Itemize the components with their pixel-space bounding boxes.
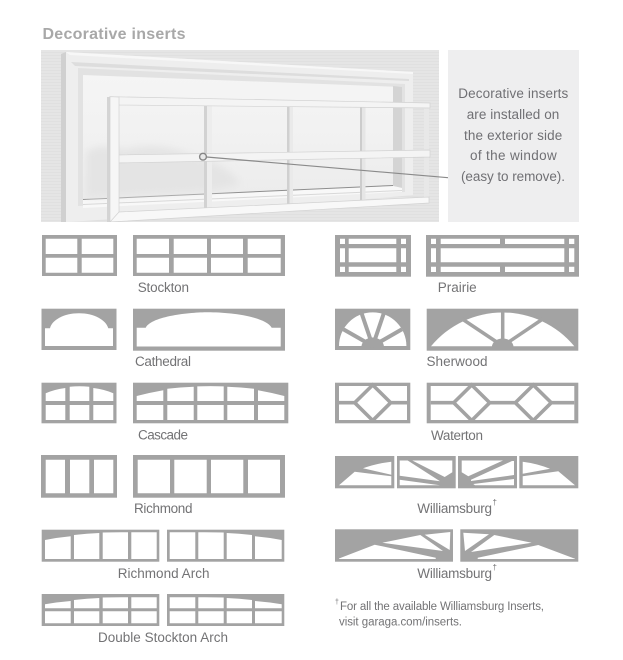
insert: Richmond xyxy=(41,455,285,516)
callout panel: of the window xyxy=(470,148,557,163)
insert: Williamsburg two-panel: Williamsburg xyxy=(417,566,492,581)
insert: Stockton xyxy=(42,235,285,295)
trees reflection xyxy=(86,146,240,198)
insert: Stockton: Stockton xyxy=(138,280,189,295)
window trim xyxy=(61,52,413,222)
insert: Williamsburg four-panel: † xyxy=(492,498,497,507)
callout leader line xyxy=(200,153,448,178)
insert: Double Stockton Arch: Double Stockton Arch xyxy=(98,630,228,645)
insert: Sherwood xyxy=(335,309,578,369)
insert: Prairie: Prairie xyxy=(438,280,477,295)
callout panel: Decorative inserts xyxy=(458,86,569,101)
callout panel: (easy to remove). xyxy=(461,169,565,184)
callout panel xyxy=(448,50,579,222)
title: Decorative inserts xyxy=(42,26,186,43)
insert: Richmond: Richmond xyxy=(134,501,192,516)
insert: Double Stockton Arch xyxy=(42,594,284,645)
footnote: † xyxy=(335,599,339,606)
insert: Cascade xyxy=(42,383,288,442)
callout panel: the exterior side xyxy=(464,128,562,143)
footnote: visit garaga.com/inserts. xyxy=(339,617,462,629)
insert: Waterton: Waterton xyxy=(431,428,483,443)
insert: Cathedral: Cathedral xyxy=(135,354,191,369)
insert: Richmond Arch: Richmond Arch xyxy=(118,566,210,581)
footnote: For all the available Williamsburg Inserts, xyxy=(340,601,544,613)
insert: Sherwood: Sherwood xyxy=(426,354,488,369)
insert: Richmond Arch xyxy=(42,530,284,581)
insert: Cathedral xyxy=(42,309,285,369)
callout panel: are installed on xyxy=(467,107,559,122)
insert: Williamsburg four-panel: Williamsburg xyxy=(417,501,492,516)
insert: Prairie xyxy=(335,235,579,295)
photo: window with decorative insert xyxy=(41,50,439,222)
insert: Williamsburg two-panel xyxy=(335,529,578,581)
insert: Cascade: Cascade xyxy=(138,428,188,442)
insert grille xyxy=(107,97,430,222)
insert: Waterton xyxy=(335,383,578,443)
insert: Williamsburg two-panel: † xyxy=(492,563,497,572)
insert: Williamsburg four-panel xyxy=(335,456,578,516)
footnote xyxy=(335,599,544,629)
